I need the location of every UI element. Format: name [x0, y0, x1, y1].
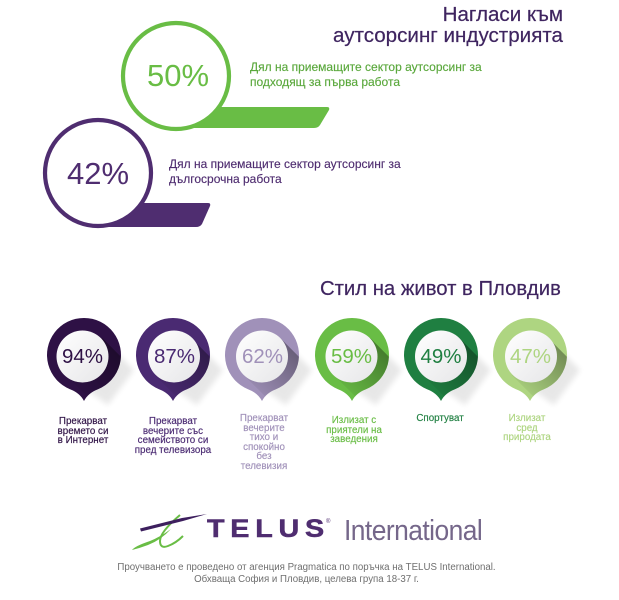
- label: nature: Излизат: [509, 413, 545, 424]
- label: TV with family: вечерите със: [143, 426, 203, 436]
- value: 50%: 50%: [147, 58, 209, 93]
- label: going out: [326, 415, 382, 445]
- label: TV with family: пред телевизора: [135, 444, 211, 456]
- text: long-term job: [169, 157, 401, 186]
- label: sports: Спортуват: [416, 413, 464, 424]
- logo wordmark: International: International: [344, 515, 482, 547]
- text: first job: [250, 60, 482, 89]
- text: first job: подходящ за първа работа: [250, 74, 400, 88]
- value: 87%: 87%: [154, 345, 195, 368]
- label: nature: [503, 413, 551, 443]
- heading: lifestyle in Plovdiv: Стил на живот в Пловдив: [320, 278, 561, 300]
- label: going out: приятели на: [326, 424, 382, 436]
- pin 6: [493, 318, 579, 404]
- purple stat bar: [90, 203, 210, 227]
- value: 47%: 47%: [510, 345, 551, 368]
- value: 62%: 62%: [242, 345, 283, 368]
- label: nature: сред: [516, 422, 538, 434]
- label: nature: природата: [503, 432, 551, 443]
- green stat circle: [123, 23, 229, 129]
- label: internet: [58, 416, 108, 446]
- value: 94%: 94%: [62, 345, 103, 368]
- footer note: Обхваща София и Пловдив, целева група 18-37 г.: [194, 574, 419, 585]
- label: quiet evenings: [240, 413, 288, 472]
- graphics layer: [42, 20, 579, 550]
- green stat bar: [170, 107, 329, 128]
- pin 5: [404, 318, 490, 404]
- footer note: Проучването е проведено от агенция Pragmatica по поръчка на TELUS International.: [117, 562, 496, 573]
- label: quiet evenings: вечерите: [243, 422, 285, 434]
- purple stat circle: [45, 120, 151, 226]
- label: internet: Прекарват: [59, 416, 107, 427]
- value: 49%: 49%: [420, 345, 462, 368]
- text: long-term job: дългосрочна работа: [169, 172, 282, 186]
- value: 42%: 42%: [67, 156, 129, 191]
- label: quiet evenings: телевизия: [241, 460, 287, 472]
- label: quiet evenings: без: [256, 451, 272, 462]
- label: going out: Излизат с: [332, 415, 376, 426]
- heading: outsourcing attitudes: Нагласи към: [443, 3, 563, 26]
- label: TV with family: Прекарват: [149, 416, 197, 427]
- pin 4: [315, 318, 401, 404]
- pin 3: [225, 318, 311, 404]
- text: first job: Дял на приемащите сектор аутсорсинг за: [250, 60, 482, 74]
- value: 59%: 59%: [331, 345, 372, 368]
- label: going out: заведения: [330, 434, 378, 445]
- logo swoosh: [132, 514, 207, 550]
- label: quiet evenings: тихо и: [250, 432, 278, 443]
- text: long-term job: Дял на приемащите сектор аутсорсинг за: [169, 157, 401, 171]
- heading: outsourcing attitudes: [333, 3, 564, 47]
- label: TV with family: семейството си: [138, 435, 208, 446]
- footer note: [117, 562, 496, 585]
- label: TV with family: [135, 416, 212, 456]
- pin 1: [47, 318, 133, 404]
- heading: outsourcing attitudes: аутсорсинг индустрията: [333, 24, 563, 47]
- logo registered mark: ®: [326, 519, 330, 525]
- pin 2: [136, 318, 222, 404]
- logo wordmark: TELUS: TELUS: [207, 515, 330, 543]
- label: quiet evenings: Прекарват: [240, 413, 288, 424]
- label: internet: времето си: [58, 426, 108, 436]
- label: internet: в Интернет: [58, 435, 108, 446]
- label: quiet evenings: спокойно: [243, 442, 285, 452]
